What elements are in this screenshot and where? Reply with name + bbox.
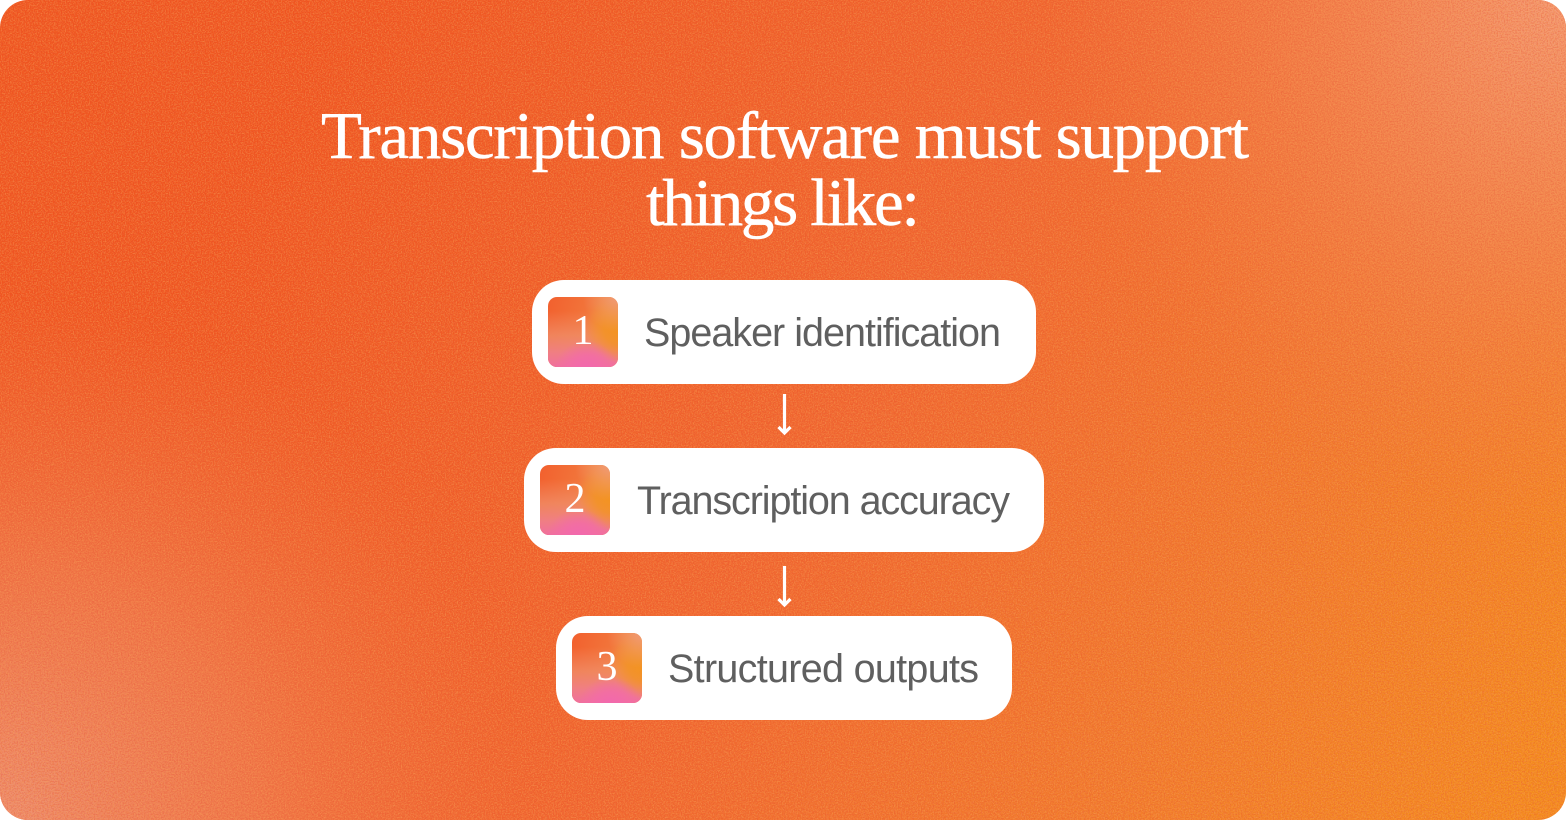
label: speaker identification: Speaker identification	[644, 311, 1001, 355]
title: things like:	[646, 166, 920, 240]
icon: number 3 tile	[572, 633, 642, 703]
label: structured outputs: Structured outputs	[668, 647, 979, 691]
step 3: structured outputs	[556, 616, 1012, 720]
title	[321, 99, 1249, 240]
icon: number 1 tile	[548, 297, 618, 367]
title: Transcription software must support	[321, 99, 1249, 173]
step 2: transcription accuracy	[524, 448, 1044, 552]
step 1: speaker identification	[532, 280, 1036, 384]
arrow: step 1 to step 2	[778, 394, 790, 433]
icon: number 2 tile	[540, 465, 610, 535]
icon: number 3 tile: 3	[596, 644, 618, 690]
icon: number 1 tile: 1	[572, 308, 594, 354]
icon: number 2 tile: 2	[564, 476, 586, 522]
label: transcription accuracy: Transcription accuracy	[637, 479, 1010, 523]
arrow: step 2 to step 3	[778, 566, 790, 605]
